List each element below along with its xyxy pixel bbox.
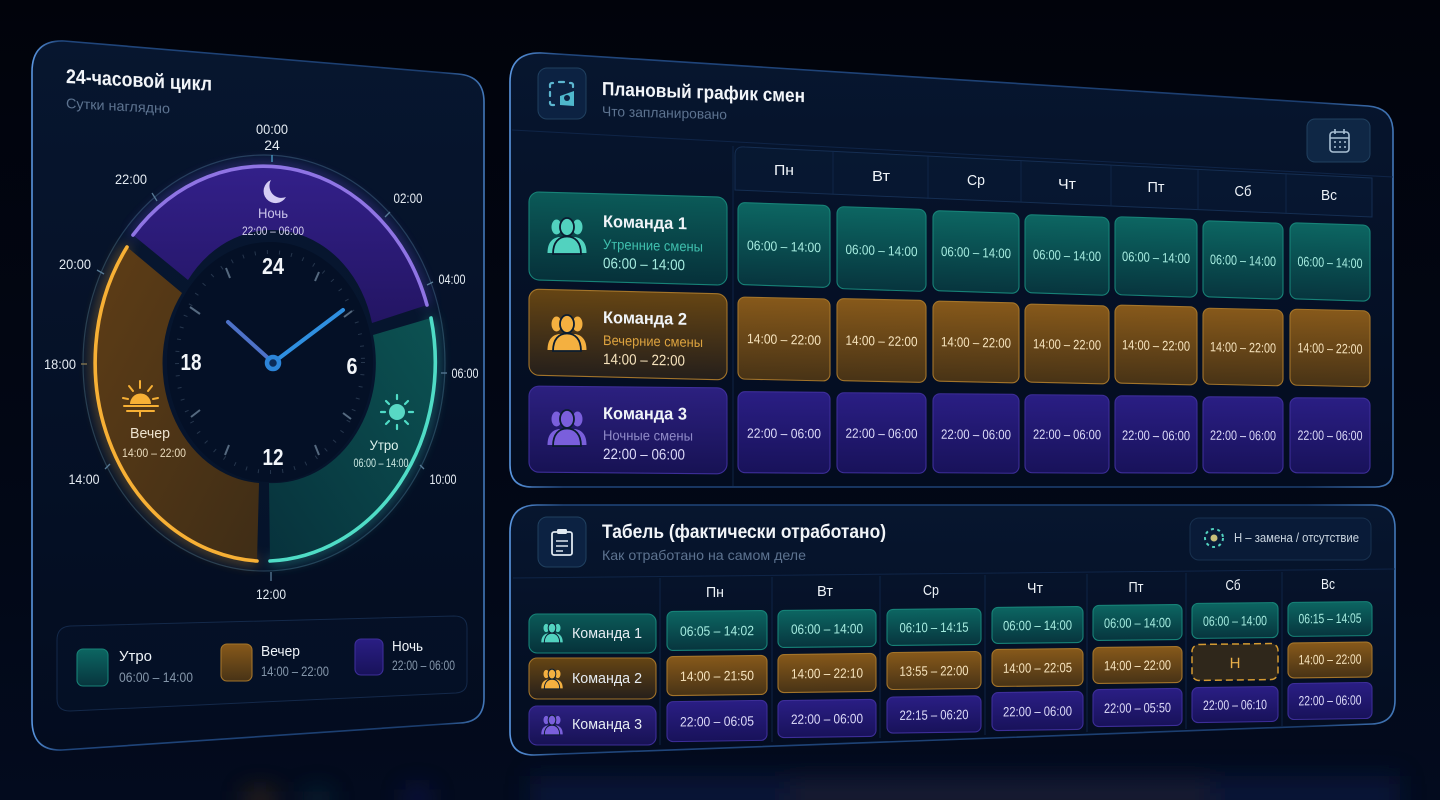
hour labels: 10:00 — [430, 471, 457, 487]
timesheet row: Team 3: 22:15 – 06:20 — [900, 707, 968, 723]
icon: sun — [381, 395, 413, 429]
heading: 24-hour cycle: 24-часовой цикл — [66, 66, 212, 96]
planned row: Team 3: 22:00 – 06:00 — [1122, 428, 1190, 443]
subheading: planned: Что запланировано — [602, 103, 727, 122]
sector: evening — [95, 247, 259, 561]
day header row: planned: Ср — [967, 172, 985, 189]
team card: Team 1 planned: Утренние смены — [603, 236, 703, 255]
planned row: Team 1: 06:00 – 14:00 — [1210, 252, 1276, 269]
legend frame — [57, 616, 467, 711]
clock hands — [228, 310, 343, 369]
absence cell: Saturday Team 2 — [1192, 643, 1278, 681]
panel shape: cycle card — [32, 41, 484, 750]
hour labels: 06:00 — [452, 365, 479, 381]
team card: Team 2 planned: 14:00 – 22:00 — [603, 351, 685, 370]
panel shape: planned — [510, 53, 1393, 487]
team card: Team 3 planned: Команда 3 — [603, 404, 687, 424]
timesheet row: Team 1 — [667, 602, 1372, 651]
planned row: Team 1: 06:00 – 14:00 — [1298, 254, 1362, 271]
day header row: planned: Чт — [1058, 176, 1076, 193]
day header row: timesheet: Вс — [1321, 576, 1335, 593]
day header row: planned: Пн — [774, 162, 794, 179]
day header row: timesheet: Пн — [706, 584, 724, 601]
timesheet row: Team 1: 06:00 – 14:00 — [1104, 615, 1171, 631]
timesheet row: Team 3: 22:00 – 06:00 — [791, 711, 863, 727]
planned row: Team 3: 22:00 – 06:00 — [1298, 428, 1362, 443]
timesheet row: Team 3: 22:00 – 05:50 — [1104, 700, 1171, 716]
team card: Team 1 planned: Команда 1 — [603, 212, 687, 233]
planned row: Team 3: 22:00 – 06:00 — [941, 427, 1011, 442]
day header row: timesheet — [706, 576, 1335, 601]
planned row: Team 2: 14:00 – 22:00 — [1298, 340, 1362, 357]
team card: Team 3 planned: 22:00 – 06:00 — [603, 446, 685, 464]
numeral 18: 18 — [180, 349, 202, 375]
hour labels: 14:00 — [68, 471, 100, 487]
panel: timesheet — [510, 505, 1395, 755]
team card: Team 1 planned — [529, 192, 727, 285]
team label: Team 1 timesheet — [529, 614, 656, 653]
planned row: Team 2: 14:00 – 22:00 — [941, 334, 1011, 351]
planned row: Team 1: 06:00 – 14:00 — [1122, 249, 1190, 266]
planned row: Team 2: 14:00 – 22:00 — [1033, 336, 1101, 353]
inner dial — [167, 242, 373, 482]
timesheet row: Team 3: 22:00 – 06:05 — [680, 713, 754, 730]
timesheet row: Team 1: 06:00 – 14:00 — [1203, 613, 1267, 629]
icon: planned schedule — [538, 68, 586, 119]
timesheet row: Team 2: 14:00 – 22:00 — [1104, 658, 1171, 673]
day header row: timesheet: Чт — [1027, 580, 1043, 597]
legend: morning — [77, 648, 193, 686]
icon: moon — [264, 180, 286, 203]
panel: planned schedule — [510, 53, 1393, 487]
planned row: Team 3: 22:00 – 06:00 — [1033, 427, 1101, 442]
planned row: Team 3 — [738, 392, 1370, 473]
team card: Team 3 planned — [529, 386, 727, 474]
panel: 24-hour cycle — [32, 41, 484, 750]
legend — [57, 616, 467, 711]
label: morning: Утро — [370, 437, 399, 453]
day header row: planned: Вс — [1321, 187, 1337, 204]
timesheet row: Team 2 — [667, 642, 1372, 696]
label: evening: Вечер — [130, 426, 170, 442]
legend: night: Ночь — [392, 638, 423, 655]
day header row: planned: Сб — [1234, 183, 1252, 200]
label: morning hours: 06:00 – 14:00 — [354, 458, 408, 470]
heading: timesheet: Табель (фактически отработано) — [602, 522, 886, 543]
legend: night: 22:00 – 06:00 — [392, 658, 455, 673]
label: evening hours: 14:00 – 22:00 — [122, 446, 186, 460]
panel shape: timesheet — [510, 505, 1395, 755]
floor reflection — [245, 776, 1400, 800]
planned row: Team 2 — [738, 297, 1370, 387]
legend: morning: Утро — [119, 648, 152, 665]
planned row: Team 3: 22:00 – 06:00 — [1210, 428, 1276, 443]
label: night: Ночь — [258, 205, 288, 221]
legend: evening: 14:00 – 22:00 — [261, 663, 329, 679]
sector glow — [95, 166, 435, 561]
icon: timesheet clipboard — [538, 517, 586, 567]
team card: Team 1 planned: 06:00 – 14:00 — [603, 255, 685, 274]
timesheet row: Team 3 — [667, 682, 1372, 742]
team card: Team 2 planned — [529, 289, 727, 380]
note: substitution legend: Н – замена / отсутствие — [1234, 531, 1359, 545]
hour labels: 18:00 — [44, 356, 76, 372]
team card: Team 3 planned: Ночные смены — [603, 427, 693, 444]
outer ring — [83, 155, 445, 571]
team label: Team 3 timesheet: Команда 3 — [572, 716, 642, 733]
team card: Team 2 planned: Вечерние смены — [603, 332, 703, 350]
subheading: cycle: Сутки наглядно — [66, 95, 170, 116]
sector: night — [133, 166, 427, 323]
day header row: timesheet: Пт — [1128, 579, 1144, 596]
numeral 12: 12 — [262, 444, 284, 470]
hour labels — [44, 121, 479, 602]
hour labels: 24 — [264, 137, 280, 153]
hour labels: 00:00 — [256, 121, 288, 137]
chart: 24-hour clock — [44, 121, 479, 602]
team label: Team 2 timesheet — [529, 658, 656, 699]
team label: Team 2 timesheet: Команда 2 — [572, 670, 642, 687]
arc: night — [133, 166, 427, 305]
timesheet row: Team 3: 22:00 – 06:10 — [1203, 697, 1267, 713]
team card: Team 2 planned: Команда 2 — [603, 308, 687, 329]
timesheet row: Team 2: 14:00 – 22:10 — [791, 666, 863, 681]
team label: Team 1 timesheet: Команда 1 — [572, 625, 642, 642]
timesheet row: Team 3: 22:00 – 06:00 — [1003, 704, 1072, 719]
day header row: timesheet: Ср — [923, 582, 939, 599]
day header row: timesheet: Вт — [817, 583, 833, 600]
hour labels: 22:00 — [115, 171, 147, 187]
timesheet row: Team 1: 06:05 – 14:02 — [680, 623, 754, 639]
planned row: Team 1: 06:00 – 14:00 — [747, 238, 821, 255]
planned row: Team 2: 14:00 – 22:00 — [747, 331, 821, 348]
planned row: Team 2: 14:00 – 22:00 — [1122, 337, 1190, 354]
hour labels: 02:00 — [394, 190, 423, 206]
label: night hours: 22:00 – 06:00 — [242, 224, 304, 238]
timesheet row: Team 1: 06:15 – 14:05 — [1299, 611, 1361, 626]
timesheet row: Team 2: 14:00 – 22:00 — [1298, 652, 1362, 667]
hour labels: 04:00 — [438, 271, 466, 287]
timesheet row: Team 2: 14:00 – 21:50 — [680, 668, 754, 684]
planned row: Team 2: 14:00 – 22:00 — [1210, 339, 1276, 356]
team label: Team 3 timesheet — [529, 706, 656, 745]
day header row: planned — [735, 147, 1372, 217]
timesheet row: Team 1: 06:00 – 14:00 — [1003, 618, 1072, 633]
icon: sunset — [123, 381, 158, 416]
dial major ticks — [190, 268, 352, 455]
legend: morning: 06:00 – 14:00 — [119, 669, 193, 685]
timesheet row: Team 1: 06:10 – 14:15 — [900, 620, 968, 635]
numeral 6: 6 — [346, 353, 358, 379]
arc: evening — [95, 247, 257, 561]
planned row: Team 3: 22:00 – 06:00 — [747, 426, 821, 441]
timesheet row: Team 2: 14:00 – 22:05 — [1003, 660, 1072, 676]
subheading: timesheet: Как отработано на самом деле — [602, 547, 806, 563]
legend: night — [355, 638, 455, 675]
day header row: planned: Вт — [872, 168, 890, 185]
legend: evening: Вечер — [261, 643, 300, 660]
absence cell: Saturday Team 2: Н — [1230, 655, 1240, 672]
heading: planned schedule: Плановый график смен — [602, 79, 805, 107]
hour labels: 20:00 — [59, 256, 91, 272]
note: substitution legend — [1190, 518, 1371, 560]
planned row: Team 3: 22:00 – 06:00 — [846, 426, 918, 441]
numeral 24: 24 — [262, 253, 284, 279]
day header row: planned: Пт — [1148, 179, 1165, 196]
arc: morning — [270, 318, 435, 561]
day header row: timesheet: Сб — [1226, 577, 1240, 594]
hour labels: 12:00 — [256, 586, 286, 602]
sector: morning — [269, 318, 435, 561]
dial minor ticks — [177, 252, 363, 472]
planned row: Team 1 — [738, 202, 1370, 301]
planned row: Team 1: 06:00 – 14:00 — [846, 242, 917, 259]
timesheet row: Team 2: 13:55 – 22:00 — [900, 663, 968, 679]
planned row: Team 1: 06:00 – 14:00 — [1033, 247, 1101, 264]
button: calendar — [1307, 119, 1370, 162]
planned row: Team 2: 14:00 – 22:00 — [846, 333, 918, 349]
outer hour ticks — [81, 155, 447, 581]
timesheet row: Team 3: 22:00 – 06:00 — [1298, 693, 1362, 708]
planned row: Team 1: 06:00 – 14:00 — [941, 244, 1011, 261]
legend: evening — [221, 643, 329, 681]
timesheet row: Team 1: 06:00 – 14:00 — [791, 621, 863, 637]
